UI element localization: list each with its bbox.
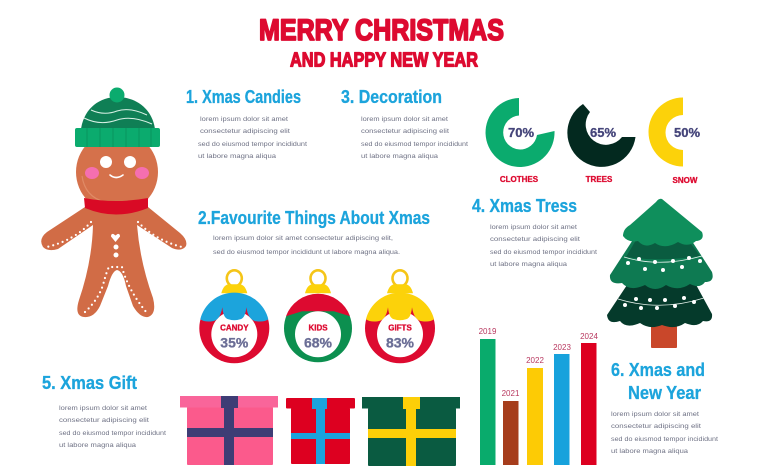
text block: consectetur adipiscing elit bbox=[361, 128, 449, 135]
gift: green bbox=[362, 397, 460, 466]
text block bbox=[361, 116, 468, 160]
text block: consectetur adipiscing elit bbox=[490, 236, 580, 243]
illustration: christmas tree bbox=[607, 199, 713, 348]
ornament: candy 35% bbox=[199, 270, 269, 363]
ornament: candy 35%: 35% bbox=[220, 334, 249, 350]
text block: sed do eiusmod tempor incididunt bbox=[198, 141, 307, 148]
bar: 2023: 2023 bbox=[553, 343, 571, 352]
ornament: candy 35%: CANDY bbox=[220, 323, 249, 332]
ornament: kids 68%: KIDS bbox=[308, 323, 328, 332]
illustration: gingerbread man bbox=[41, 88, 186, 317]
donut: clothes 70%: CLOTHES bbox=[500, 175, 539, 184]
text block: lorem ipsum dolor sit amet bbox=[59, 405, 147, 412]
heading: 1. Xmas Candies bbox=[186, 87, 301, 107]
text block: sed do eiusmod tempor incididunt ut labore magna aliqua. bbox=[213, 249, 400, 256]
text block: lorem ipsum dolor sit amet bbox=[611, 411, 699, 418]
donut charts bbox=[486, 98, 700, 185]
text block: sed do eiusmod tempor incididunt bbox=[611, 436, 718, 443]
donut: snow 50% bbox=[648, 98, 700, 185]
gift: red bbox=[286, 398, 355, 464]
text block: ut labore magna aliqua bbox=[361, 153, 438, 160]
heading: 3. Decoration bbox=[341, 87, 442, 107]
bar: 2024: 2024 bbox=[580, 332, 598, 341]
heading: New Year bbox=[628, 383, 701, 403]
section 2: favourite things bbox=[198, 208, 430, 256]
heading: 4. Xmas Tress bbox=[472, 196, 577, 216]
text block: sed do eiusmod tempor incididunt bbox=[361, 141, 468, 148]
text block bbox=[198, 116, 307, 160]
icing dots bbox=[47, 222, 182, 313]
text block bbox=[59, 405, 166, 449]
title bbox=[259, 14, 504, 72]
hat bbox=[75, 88, 160, 147]
face bbox=[85, 156, 149, 179]
heading: 6. Xmas and bbox=[611, 360, 705, 380]
section 3: decoration bbox=[341, 87, 468, 160]
text block: consectetur adipiscing elit bbox=[200, 128, 290, 135]
gift: pink bbox=[180, 396, 278, 465]
ornament: gifts 83% bbox=[365, 270, 435, 363]
title: AND HAPPY NEW YEAR bbox=[290, 50, 478, 72]
scarf bbox=[84, 198, 148, 214]
section 4: xmas trees bbox=[472, 196, 597, 268]
text block bbox=[213, 235, 400, 256]
text block: sed do eiusmod tempor incididunt bbox=[59, 430, 166, 437]
title: MERRY CHRISTMAS bbox=[259, 14, 504, 47]
icing buttons bbox=[111, 234, 120, 258]
bar: 2019: 2019 bbox=[479, 327, 497, 336]
text block: lorem ipsum dolor sit amet consectetur adipiscing elit, bbox=[213, 235, 393, 242]
section 6: xmas and new year bbox=[611, 360, 718, 455]
text block bbox=[611, 411, 718, 455]
heading bbox=[611, 360, 705, 403]
donut: snow 50%: 50% bbox=[674, 125, 700, 140]
text block: lorem ipsum dolor sit amet bbox=[361, 116, 448, 123]
donut: trees 65% bbox=[567, 104, 636, 184]
text block: sed do eiusmod tempor incididunt bbox=[490, 249, 597, 256]
ornament: gifts 83%: GIFTS bbox=[388, 323, 412, 332]
donut: clothes 70% bbox=[486, 98, 555, 184]
text block bbox=[490, 224, 597, 268]
bar: 2021: 2021 bbox=[502, 389, 520, 398]
ornament: gifts 83%: 83% bbox=[386, 334, 415, 350]
ornament: kids 68% bbox=[284, 270, 352, 362]
text block: ut labore magna aliqua bbox=[59, 442, 136, 449]
section 5: xmas gift bbox=[42, 373, 166, 449]
text block: lorem ipsum dolor sit amet bbox=[200, 116, 288, 123]
heading: 2.Favourite Things About Xmas bbox=[198, 208, 430, 228]
bar: 2022: 2022 bbox=[526, 356, 544, 365]
heading: 5. Xmas Gift bbox=[42, 373, 137, 393]
donut: trees 65%: 65% bbox=[590, 125, 616, 140]
donut: trees 65%: TREES bbox=[586, 175, 613, 184]
bar chart bbox=[479, 327, 598, 465]
text block: ut labore magna aliqua bbox=[198, 153, 276, 160]
donut: clothes 70%: 70% bbox=[508, 125, 534, 140]
ornament: kids 68%: 68% bbox=[304, 334, 333, 350]
text block: consectetur adipiscing elit bbox=[59, 417, 149, 424]
text block: ut labore magna aliqua bbox=[611, 448, 688, 455]
donut: snow 50%: SNOW bbox=[673, 176, 698, 185]
text block: consectetur adipiscing elit bbox=[611, 423, 701, 430]
text block: lorem ipsum dolor sit amet bbox=[490, 224, 577, 231]
text block: ut labore magna aliqua bbox=[490, 261, 567, 268]
section 1: xmas candies bbox=[186, 87, 307, 160]
